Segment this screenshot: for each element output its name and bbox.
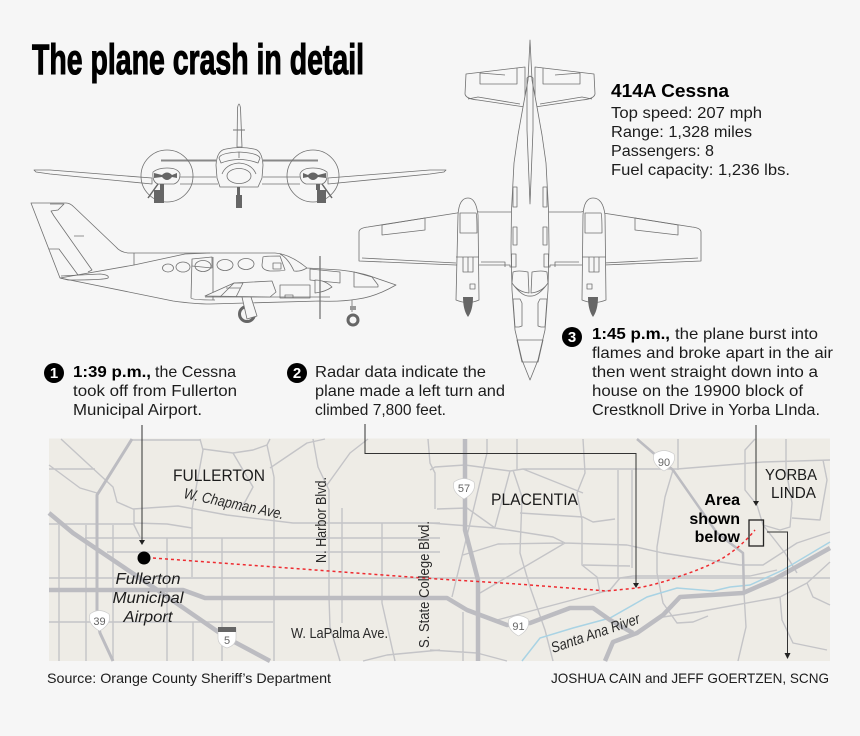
icon: plane side view bbox=[31, 203, 396, 325]
text block: aircraft specs: Fuel capacity: 1,236 lbs. bbox=[611, 162, 790, 179]
shields: 39 bbox=[93, 616, 106, 628]
source: Source: Orange County Sheriff’s Department bbox=[47, 670, 331, 686]
city labels: FULLERTON bbox=[173, 466, 265, 485]
step 1 text bbox=[44, 363, 237, 419]
text block: aircraft specs: Range: 1,328 miles bbox=[611, 124, 752, 141]
arrow: area shown below bbox=[767, 532, 790, 659]
step 1 text: 1:39 p.m., bbox=[73, 364, 151, 381]
shields bbox=[89, 450, 675, 648]
title: The plane crash in detail bbox=[32, 36, 364, 84]
step 3 text bbox=[562, 326, 834, 419]
step 3 text: house on the 19900 block of bbox=[592, 383, 804, 400]
step 1 text: the Cessna bbox=[155, 364, 236, 381]
text block: aircraft specs: Top speed: 207 mph bbox=[611, 105, 762, 122]
step 2 text bbox=[287, 363, 505, 419]
step 2 text: 2 bbox=[293, 365, 301, 382]
flight path bbox=[153, 530, 755, 591]
airport label: Municipal bbox=[112, 590, 184, 607]
icon: plane front view bbox=[34, 104, 446, 208]
step 2 text: Radar data indicate the bbox=[315, 364, 486, 381]
airport label bbox=[112, 571, 184, 626]
river bbox=[522, 542, 830, 661]
area label bbox=[689, 492, 741, 546]
step 1 text: 1 bbox=[50, 365, 58, 382]
arrow: step 1 bbox=[139, 425, 145, 545]
step 3 text: the plane burst into bbox=[675, 326, 818, 343]
shields: 57 bbox=[458, 483, 470, 495]
step 3 text: flames and broke apart in the air bbox=[592, 345, 834, 362]
step 3 text: Crestknoll Drive in Yorba LInda. bbox=[592, 402, 820, 419]
local roads bbox=[49, 439, 830, 661]
map bbox=[49, 438, 830, 661]
text block: aircraft specs: Passengers: 8 bbox=[611, 143, 714, 160]
step 3 text: 3 bbox=[568, 329, 576, 346]
street labels: N. Harbor Blvd. bbox=[313, 477, 330, 563]
shields: 5 bbox=[224, 635, 230, 647]
step 1 text: took off from Fullerton bbox=[73, 383, 237, 400]
text block: aircraft specs: 414A Cessna bbox=[611, 81, 730, 101]
step 3 text: 1:45 p.m., bbox=[592, 326, 670, 343]
street labels: Santa Ana River bbox=[549, 610, 643, 657]
text block: aircraft specs bbox=[611, 81, 790, 179]
area label: below bbox=[695, 529, 741, 546]
airport label: Fullerton bbox=[116, 571, 181, 588]
city labels: YORBA bbox=[765, 467, 817, 484]
step 2 text: climbed 7,800 feet. bbox=[315, 402, 446, 419]
street labels: S. State College Blvd. bbox=[416, 521, 433, 648]
airport dot bbox=[138, 552, 150, 564]
area label: shown bbox=[689, 511, 740, 528]
area box bbox=[749, 520, 764, 546]
arrow: step 3 bbox=[753, 425, 759, 506]
step 1 text: Municipal Airport. bbox=[73, 402, 202, 419]
shields: 90 bbox=[658, 457, 670, 469]
area label: Area bbox=[704, 492, 740, 509]
city labels: PLACENTIA bbox=[491, 490, 579, 509]
step 2 text: plane made a left turn and bbox=[315, 383, 505, 400]
street labels: W. LaPalma Ave. bbox=[291, 625, 388, 642]
street labels bbox=[182, 477, 643, 657]
icon: plane top view bbox=[359, 40, 701, 380]
credit: JOSHUA CAIN and JEFF GOERTZEN, SCNG bbox=[551, 670, 829, 686]
city labels bbox=[173, 466, 817, 509]
street labels: W. Chapman Ave. bbox=[182, 485, 285, 523]
city labels: LINDA bbox=[771, 485, 816, 502]
step 3 text: then went straight down into a bbox=[592, 364, 818, 381]
airport label: Airport bbox=[122, 609, 173, 626]
arrow: step 2 bbox=[365, 424, 639, 588]
shields: 91 bbox=[512, 621, 525, 633]
highways bbox=[49, 439, 830, 661]
